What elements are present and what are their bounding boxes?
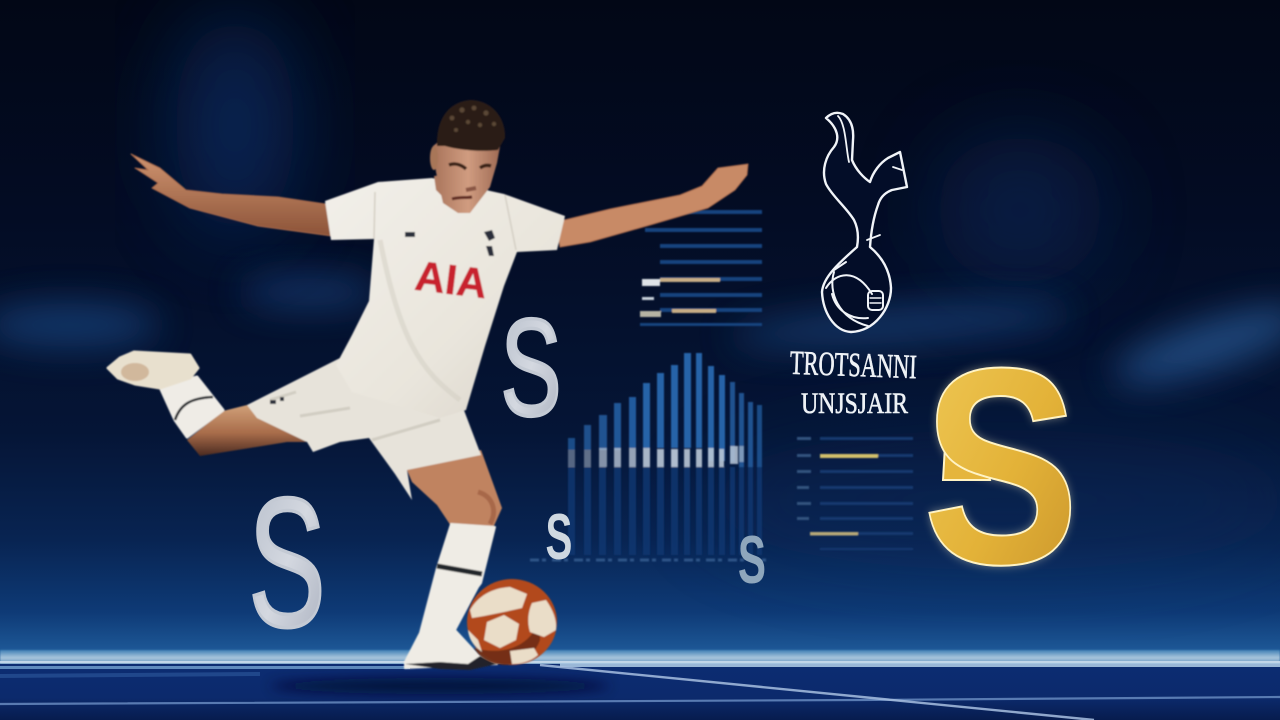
player shirt badges xyxy=(270,230,495,404)
chart: vertical bars xyxy=(530,353,770,560)
player neck and head xyxy=(430,100,505,213)
icon: small S left of chart: S xyxy=(546,501,572,573)
icon: silver S centre: S xyxy=(501,290,561,445)
chart: horizontal bars lower xyxy=(797,437,913,550)
football xyxy=(467,579,557,665)
player shirt xyxy=(325,178,565,418)
sponsor text: AIA xyxy=(413,252,490,307)
player xyxy=(108,100,748,670)
chart: horizontal bars upper xyxy=(640,210,762,326)
icon: small S right of chart: S xyxy=(738,522,766,597)
logo wordmark: UNJSJAIR xyxy=(801,387,908,420)
logo: cockerel on ball xyxy=(822,113,907,332)
floor and horizon xyxy=(0,650,1280,720)
player left arm xyxy=(131,154,332,236)
player standing leg xyxy=(406,450,502,528)
player raised sock xyxy=(160,377,223,437)
logo wordmark xyxy=(789,345,917,420)
player standing sock and boot xyxy=(405,524,497,668)
icon: gold S with glow: S xyxy=(923,310,1079,623)
icon: gold S with glow: S xyxy=(923,310,1079,623)
player raised leg xyxy=(187,405,307,456)
icon: silver S lower left: S xyxy=(248,460,326,665)
player shorts xyxy=(247,358,481,500)
logo wordmark: TROTSANNI xyxy=(789,345,917,386)
player right arm xyxy=(556,164,748,247)
player raised boot xyxy=(108,352,198,388)
